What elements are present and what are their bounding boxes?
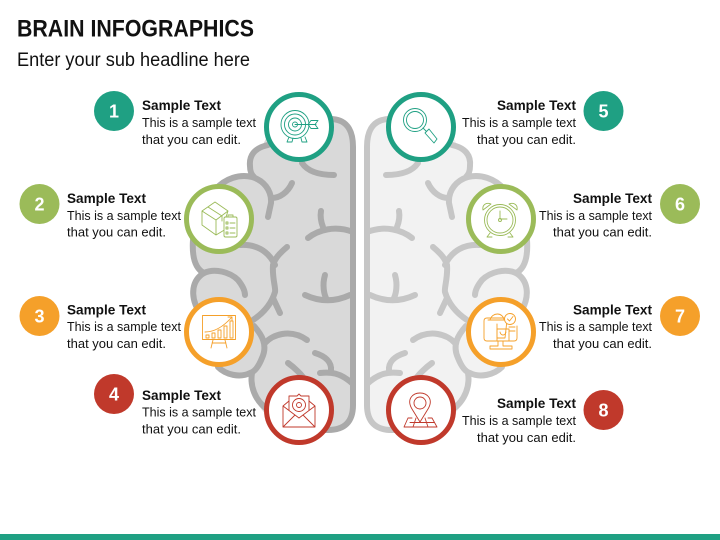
sub headline: Enter your sub headline here <box>17 50 250 71</box>
item 3: 3 <box>34 306 45 326</box>
item 1: This is a sample text <box>142 115 256 130</box>
icon ring 8: location pin <box>388 378 454 442</box>
item 1: that you can edit. <box>142 132 241 147</box>
icon ring 6: alarm clock <box>468 186 534 252</box>
item 6: that you can edit. <box>553 224 652 240</box>
item 2: This is a sample text <box>67 208 181 223</box>
item 3: Sample Text <box>67 302 146 318</box>
item 7: 7 <box>675 306 685 326</box>
left brain hemisphere <box>192 119 353 430</box>
item 2 <box>20 184 181 240</box>
item 6: 6 <box>675 194 685 214</box>
icon ring 4: mail <box>266 378 332 442</box>
item 4: This is a sample text <box>142 404 256 420</box>
item 8: This is a sample text <box>462 413 576 428</box>
item 1: 1 <box>109 102 119 122</box>
item 6 <box>539 184 700 240</box>
item 4: 4 <box>109 384 119 404</box>
item 7: Sample Text <box>573 302 652 318</box>
icon ring 1: target <box>266 94 332 160</box>
item 4: Sample Text <box>142 387 221 403</box>
item 6: This is a sample text <box>539 208 652 223</box>
title: BRAIN INFOGRAPHICS <box>17 16 254 42</box>
item 5: Sample Text <box>497 97 576 113</box>
item 8: 8 <box>598 400 609 420</box>
item 3: that you can edit. <box>67 336 166 351</box>
item 4: that you can edit. <box>142 422 241 436</box>
item 8: Sample Text <box>497 395 576 411</box>
item 2: 2 <box>34 194 45 214</box>
item 5: 5 <box>598 102 609 122</box>
item 1 <box>94 91 256 147</box>
item 7 <box>539 296 700 351</box>
icon ring 3: presentation chart <box>186 300 252 364</box>
item 5 <box>462 91 624 147</box>
item 3 <box>20 296 181 351</box>
item 7: This is a sample text <box>539 319 652 334</box>
icon ring 2: box and checklist <box>186 186 252 252</box>
item 6: Sample Text <box>573 190 652 206</box>
item 7: that you can edit. <box>553 336 652 351</box>
item 1: Sample Text <box>142 97 221 113</box>
item 5: that you can edit. <box>477 132 576 147</box>
right brain hemisphere <box>367 119 528 430</box>
item 3: This is a sample text <box>67 319 181 334</box>
item 5: This is a sample text <box>462 115 576 130</box>
icon ring 7: online shopping monitor <box>468 300 534 364</box>
item 8: that you can edit. <box>477 430 576 445</box>
icon ring 5: magnifier <box>388 94 454 160</box>
item 4 <box>94 374 256 436</box>
item 2: that you can edit. <box>67 224 166 240</box>
item 8 <box>462 390 624 445</box>
item 2: Sample Text <box>67 190 146 206</box>
bottom bar <box>0 534 720 540</box>
